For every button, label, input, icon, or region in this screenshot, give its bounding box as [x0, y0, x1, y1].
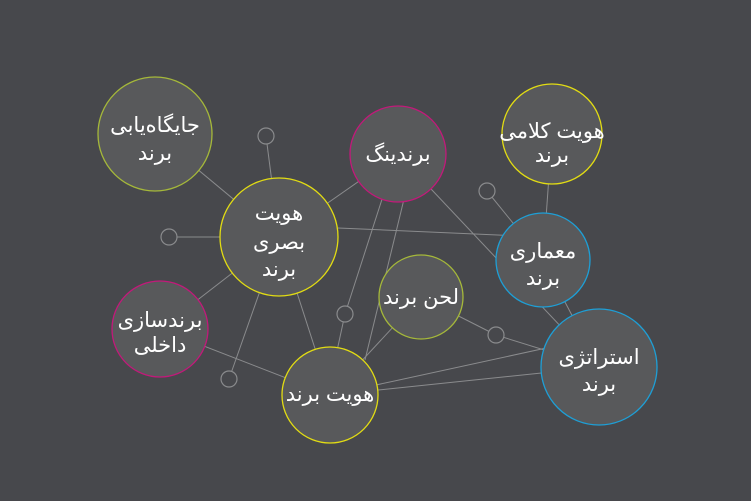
node: hoviat brand	[282, 347, 378, 443]
node: hoviat basari	[220, 178, 338, 296]
node: branding: برندینگ	[365, 142, 431, 166]
node: brandsazi dakheli	[112, 281, 208, 377]
node: strategy: استراتژی	[558, 346, 640, 369]
node: branding	[350, 106, 446, 202]
node: jayegah yabi: برند	[138, 142, 172, 165]
node: strategy	[541, 309, 657, 425]
node: hoviat basari: هویت	[255, 202, 303, 225]
node: memari: معماری	[510, 240, 576, 263]
node: jayegah yabi	[98, 77, 212, 191]
node: hoviat kalami: هویت کلامی	[499, 120, 605, 143]
node: hoviat kalami	[499, 84, 605, 184]
node: hoviat kalami: برند	[535, 144, 569, 167]
node: brandsazi dakheli: برندسازی	[118, 309, 202, 332]
node: brandsazi dakheli: داخلی	[134, 334, 186, 357]
node: hoviat basari: بصری	[253, 231, 305, 254]
node: memari: برند	[526, 267, 560, 290]
node: lahn	[379, 255, 463, 339]
node: hoviat basari: برند	[262, 258, 296, 281]
node: memari	[496, 213, 590, 307]
node: strategy: برند	[582, 373, 616, 396]
node: lahn: لحن برند	[383, 286, 459, 309]
node: jayegah yabi: جایگاه‌یابی	[110, 113, 200, 137]
small node circles	[161, 128, 504, 387]
node: hoviat brand: هویت برند	[286, 383, 374, 406]
